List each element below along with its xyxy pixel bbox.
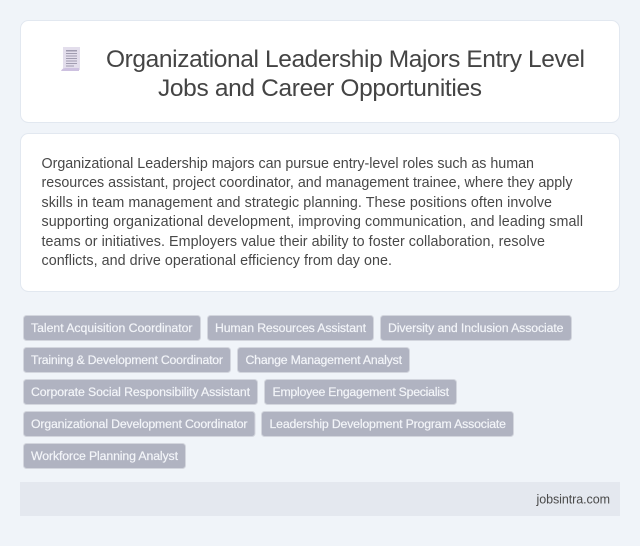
tag: Diversity and Inclusion Associate: Diversity and Inclusion Associate (388, 321, 564, 335)
tag: Workforce Planning Analyst (24, 444, 186, 468)
footer source text: jobsintra.com (536, 492, 610, 506)
tag: Human Resources Assistant: Human Resources Assistant (215, 321, 367, 335)
tag: Employee Engagement Specialist (264, 380, 456, 404)
text block: description: conflicts, and drive operational efficiency from day one. (42, 253, 392, 269)
tag: Change Management Analyst: Change Management Analyst (246, 353, 403, 367)
tag: Organizational Development Coordinator (24, 412, 255, 436)
title: Organizational Leadership Majors Entry Level (106, 46, 585, 73)
panel: description (20, 134, 620, 292)
tag: Change Management Analyst (238, 348, 410, 372)
panel: title card (20, 20, 620, 122)
tag: Leadership Development Program Associate: Leadership Development Program Associate (270, 417, 506, 431)
tag: Training & Development Coordinator: Training & Development Coordinator (31, 353, 223, 367)
tag: Corporate Social Responsibility Assistant (24, 380, 258, 404)
tag: Workforce Planning Analyst: Workforce Planning Analyst (31, 449, 179, 463)
text block: description: skills in team management and strategic planning. These positions often involve (42, 195, 552, 211)
tag: Human Resources Assistant (208, 316, 374, 340)
title: Jobs and Career Opportunities (158, 75, 482, 102)
text block: description: resources assistant, project coordinator, and management trainee, where they apply (42, 175, 573, 191)
tag: Training & Development Coordinator (24, 348, 230, 372)
text block: description: teams or initiatives. Employers value their ability to foster collaboration, resolve (42, 234, 545, 250)
tag: Talent Acquisition Coordinator (24, 316, 200, 340)
tag: Organizational Development Coordinator: Organizational Development Coordinator (31, 417, 248, 431)
tag: Corporate Social Responsibility Assistant: Corporate Social Responsibility Assistant (31, 385, 251, 399)
title (106, 46, 585, 102)
tag: Leadership Development Program Associate (262, 412, 514, 436)
tag: Talent Acquisition Coordinator: Talent Acquisition Coordinator (31, 321, 192, 335)
footer (20, 482, 620, 516)
icon: document scroll (61, 47, 80, 71)
tag: Employee Engagement Specialist: Employee Engagement Specialist (272, 385, 450, 399)
tag: Diversity and Inclusion Associate (380, 316, 572, 340)
panel: job tags (24, 316, 572, 468)
text block: description: Organizational Leadership majors can pursue entry-level roles such as human (42, 156, 534, 172)
text block: description (42, 156, 583, 269)
text block: description: supporting organizational development, improving communication, and leading small (42, 214, 583, 230)
